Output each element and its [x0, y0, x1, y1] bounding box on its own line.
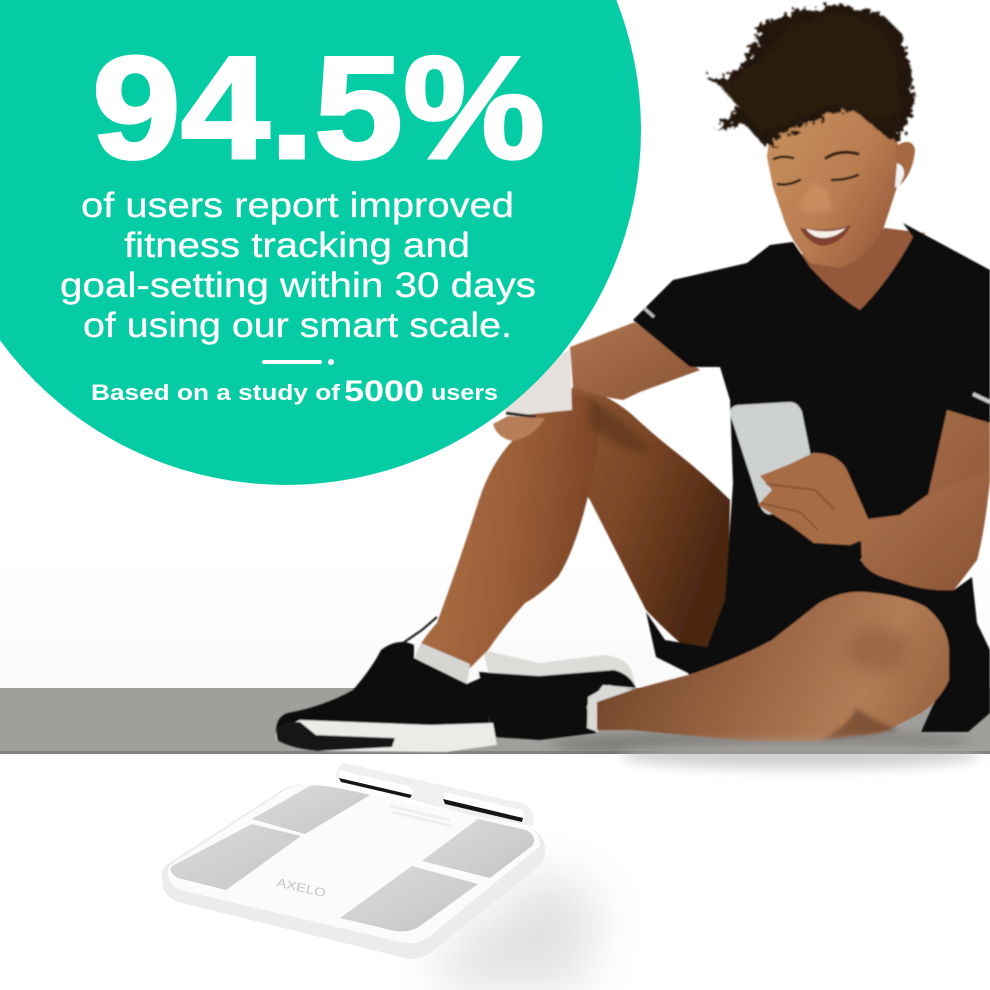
description text: of using our smart scale.	[83, 306, 512, 345]
study note: 5000	[344, 375, 424, 408]
person	[276, 4, 990, 756]
scale pad rear left	[252, 785, 370, 834]
ear	[896, 142, 915, 188]
hair	[706, 4, 914, 148]
shoe lace	[403, 617, 437, 643]
scale pad front left	[170, 824, 301, 890]
study note: Based on a study of	[91, 380, 341, 405]
description text	[60, 186, 536, 345]
left sleeve stripe	[644, 308, 654, 317]
description text: of users report improved	[81, 186, 514, 225]
front sock	[414, 643, 470, 684]
background wash	[0, 560, 990, 690]
rear shoe	[479, 650, 636, 740]
description text: fitness tracking and	[124, 226, 470, 265]
earbud	[895, 163, 904, 188]
study note	[91, 375, 498, 408]
scale brand: AXELO	[275, 875, 327, 900]
scale pad front right	[340, 866, 478, 931]
card on wrist	[490, 350, 572, 416]
right sleeve stripe	[973, 394, 990, 402]
right forearm over shirt	[860, 470, 990, 590]
front shoe upper	[276, 642, 490, 730]
headline statistic: 94.5%	[92, 26, 545, 189]
mat shadow under person	[550, 732, 970, 756]
raised thigh	[540, 387, 730, 650]
scale base	[162, 784, 545, 959]
resting hand	[493, 416, 545, 441]
upper arm right	[846, 405, 990, 590]
scale top surface	[168, 785, 540, 943]
green stat circle	[0, 0, 641, 485]
finger lines	[760, 484, 835, 530]
scale cast shadow	[430, 870, 600, 990]
scale pad rear right	[422, 819, 534, 878]
holding hand	[758, 453, 875, 545]
scale display	[390, 806, 452, 826]
front shoe sole	[276, 720, 497, 752]
scale rear handle	[336, 763, 534, 826]
shirt and shorts	[633, 223, 990, 732]
floor leg crease	[820, 708, 900, 741]
raised lower leg	[420, 394, 600, 668]
smart scale	[162, 763, 600, 990]
mouth	[800, 225, 851, 246]
teeth	[806, 228, 846, 238]
face	[767, 100, 914, 268]
study note: users	[431, 380, 498, 405]
phone	[730, 402, 812, 514]
eyes	[778, 175, 858, 184]
upper arm left	[570, 322, 700, 400]
floor below mat	[0, 754, 990, 990]
exercise mat	[0, 688, 990, 754]
nose	[798, 182, 832, 213]
description text: goal-setting within 30 days	[60, 266, 536, 305]
floor leg	[597, 592, 949, 741]
eyebrows	[774, 152, 858, 159]
sole tread	[276, 722, 395, 751]
divider with dot	[262, 359, 334, 365]
neck	[800, 228, 925, 325]
knee shading	[590, 398, 652, 452]
floor reflection shadow	[620, 741, 980, 769]
wrist band	[506, 413, 536, 417]
floor leg knee shading	[848, 628, 908, 672]
